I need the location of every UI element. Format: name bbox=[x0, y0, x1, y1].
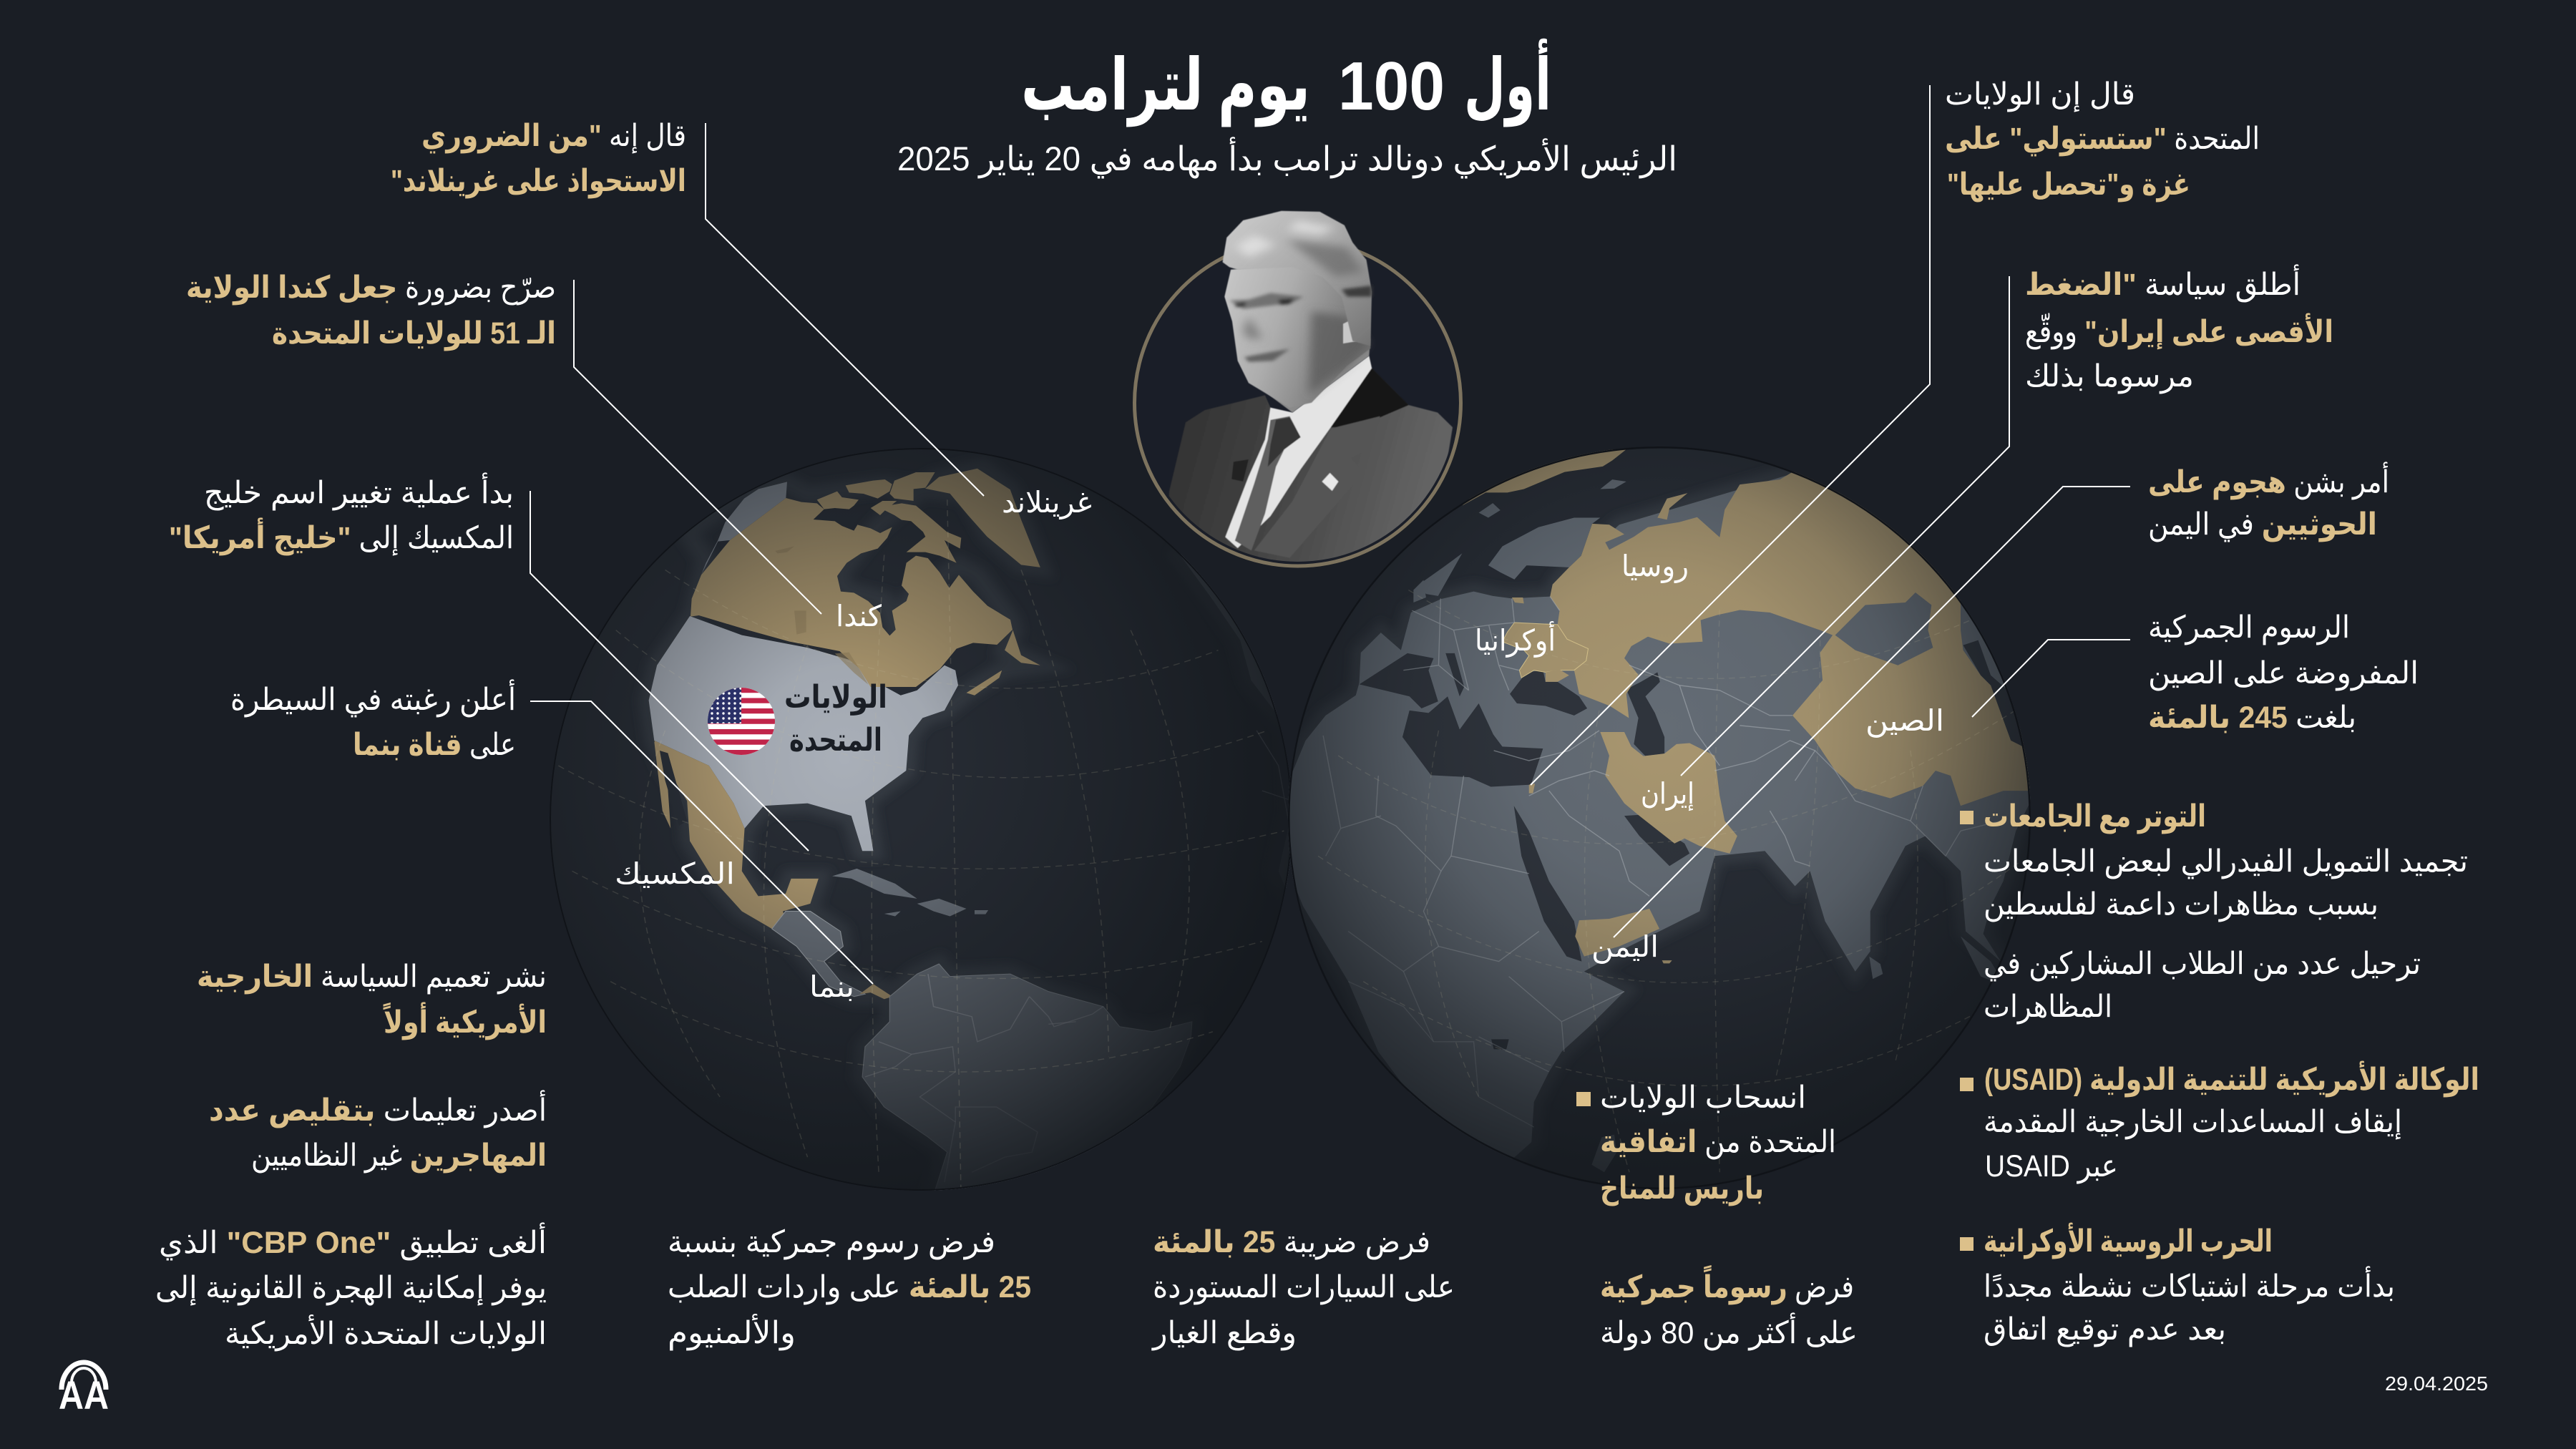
Persian Gulf bbox=[1624, 815, 1689, 866]
text: Russia-Ukraine war: الحرب الروسية الأوكرانية bbox=[1984, 1222, 2273, 1259]
Russia and China bbox=[1550, 464, 2031, 806]
globe shading bbox=[1288, 447, 2031, 1189]
text: America First bbox=[197, 960, 547, 1040]
text: car tariffs: فرض ضريبة 25 بالمئة bbox=[1153, 1225, 1430, 1260]
text: 80 countries bbox=[1600, 1265, 1858, 1351]
text: car tariffs: على السيارات المستوردة bbox=[1153, 1270, 1455, 1305]
text: migrants: أصدر تعليمات بتقليص عدد bbox=[209, 1090, 547, 1128]
Eurasia and Africa land bbox=[1268, 474, 2036, 1187]
Canada, Alaska and Arctic islands bbox=[691, 472, 1013, 687]
Iceland and Svalbard bbox=[1479, 479, 1626, 517]
Scandinavia bbox=[1488, 517, 1600, 580]
text: 80 countries: فرض رسوماً جمركية bbox=[1600, 1265, 1854, 1305]
text: Canada: الـ 51 للولايات المتحدة bbox=[272, 316, 556, 351]
text: Yemen: أمر بشن هجوم على bbox=[2148, 462, 2389, 500]
text: Paris Agreement: باريس للمناخ bbox=[1600, 1171, 1764, 1206]
leader: Yemen bbox=[1614, 487, 2130, 937]
text: Gulf of Mexico: المكسيك إلى "خليج أمريكا" bbox=[169, 517, 514, 556]
Yemen bbox=[1575, 909, 1672, 963]
map labels bbox=[615, 486, 1944, 1003]
text: migrants bbox=[209, 1090, 547, 1174]
text: America First: الأمريكية أولاً bbox=[383, 1002, 547, 1040]
South America bbox=[862, 964, 1192, 1212]
leader: Canada bbox=[574, 280, 821, 614]
title: يوم لترامب bbox=[1021, 45, 1310, 127]
text: Gulf of Mexico: بدأ عملية تغيير اسم خليج bbox=[204, 472, 514, 511]
text: China tariffs: المفروضة على الصين bbox=[2148, 656, 2419, 691]
text: Yemen bbox=[2148, 462, 2389, 542]
Mediterranean Sea bbox=[1360, 653, 1543, 786]
leader: Greenland bbox=[706, 123, 984, 496]
text: Greenland: قال إنه "من الضروري bbox=[421, 119, 686, 154]
label: Yemen: اليمن bbox=[1591, 930, 1659, 964]
text: China tariffs bbox=[2148, 610, 2419, 735]
leader: Gaza bbox=[1531, 85, 1930, 785]
country borders bbox=[865, 731, 1292, 1182]
text: universities: ترحيل عدد من الطلاب المشاركين في bbox=[1984, 947, 2421, 982]
text: universities: تجميد التمويل الفيدرالي لبعض الجامعات bbox=[1984, 844, 2468, 879]
text: steel tariffs: 25 بالمئة على واردات الصلب bbox=[668, 1270, 1031, 1305]
Caribbean islands bbox=[832, 869, 988, 916]
graticule bbox=[1318, 590, 2031, 1172]
Alaska bbox=[701, 482, 787, 575]
text: CBP One: يوفر إمكانية الهجرة القانونية إلى bbox=[155, 1271, 547, 1306]
Gulf of California bbox=[660, 751, 687, 826]
text: universities: بسبب مظاهرات داعمة لفلسطين bbox=[1984, 887, 2379, 922]
bullet bbox=[1960, 811, 1974, 824]
text: steel tariffs bbox=[668, 1225, 1031, 1351]
Lakes bbox=[1491, 1039, 1509, 1049]
text: CBP One bbox=[155, 1222, 547, 1352]
text: Greenland: الاستحواذ على غرينلاند" bbox=[391, 164, 686, 199]
country borders bbox=[1323, 597, 2001, 1127]
Iceland, Europe and Africa edge bbox=[1180, 530, 1355, 911]
logo: AA: AA bbox=[59, 1372, 109, 1418]
text: Russia-Ukraine war: بعد عدم توقيع اتفاق bbox=[1984, 1312, 2226, 1347]
Madagascar bbox=[1591, 1135, 1616, 1172]
text: Canada: صرّح بضرورة جعل كندا الولاية bbox=[186, 270, 556, 306]
Baffin and Arctic islands bbox=[817, 472, 961, 563]
globe: Americas bbox=[550, 448, 1290, 1191]
portrait: Donald Trump in ring bbox=[1135, 211, 1461, 566]
subtitle: الرئيس الأمريكي دونالد ترامب بدأ مهامه في 20 يناير 2025 bbox=[897, 137, 1677, 179]
globe shading bbox=[550, 448, 1292, 1191]
label: China: الصين bbox=[1865, 704, 1944, 738]
title: 100 bbox=[1338, 48, 1445, 125]
text: universities bbox=[1960, 799, 2468, 1025]
text: CBP One: ألغى تطبيق "CBP One" الذي bbox=[159, 1222, 547, 1261]
text: Iran bbox=[2025, 264, 2333, 394]
text: Paris Agreement: انسحاب الولايات bbox=[1600, 1080, 1806, 1116]
label: United States: المتحدة bbox=[789, 723, 882, 758]
text: Russia-Ukraine war bbox=[1960, 1222, 2395, 1347]
text: Gaza bbox=[1945, 77, 2260, 203]
Sea of Japan bbox=[1963, 640, 2031, 751]
bullet bbox=[1576, 1092, 1591, 1106]
text: China tariffs: الرسوم الجمركية bbox=[2148, 610, 2350, 645]
text: universities: التوتر مع الجامعات bbox=[1984, 799, 2206, 834]
text: Paris Agreement bbox=[1576, 1080, 1836, 1206]
label: United States bbox=[784, 680, 887, 758]
label: Russia: روسيا bbox=[1621, 550, 1689, 583]
text: USAID: عبر USAID bbox=[1985, 1149, 2118, 1184]
text: Greenland bbox=[391, 119, 686, 199]
text: Gaza: غزة و"تحصل عليها" bbox=[1947, 167, 2190, 203]
Novaya Zemlya bbox=[1657, 493, 1687, 519]
text: Yemen: الحوثيين في اليمن bbox=[2148, 507, 2377, 542]
label: Ukraine: أوكرانيا bbox=[1475, 621, 1556, 658]
Palestine bbox=[1529, 784, 1535, 794]
graticule bbox=[558, 499, 1284, 1187]
bullet bbox=[1960, 1237, 1974, 1251]
text: 80 countries: على أكثر من 80 دولة bbox=[1600, 1312, 1858, 1351]
Greenland edge bbox=[1462, 449, 1626, 506]
Mongolia bbox=[1835, 592, 1933, 665]
label: Greenland: غرينلاند bbox=[1002, 486, 1092, 519]
leader: China bbox=[1972, 640, 2130, 717]
Kaliningrad bbox=[1512, 597, 1524, 603]
leader: Iran bbox=[1681, 276, 2009, 776]
Indonesia bbox=[1961, 937, 2006, 987]
Central America bbox=[772, 911, 865, 997]
text: USAID: الوكالة الأمريكية للتنمية الدولية (USAID) bbox=[1984, 1060, 2479, 1098]
text: Canada bbox=[186, 270, 556, 351]
Canada mainland bbox=[691, 498, 1013, 687]
Caspian Sea bbox=[1626, 673, 1664, 756]
United States bbox=[649, 616, 958, 851]
Black Sea bbox=[1510, 670, 1587, 716]
Sri Lanka bbox=[1869, 957, 1883, 979]
text: car tariffs: وقطع الغيار bbox=[1151, 1316, 1297, 1351]
text: Gaza: المتحدة "ستستولي" على bbox=[1945, 122, 2260, 157]
text: USAID: إيقاف المساعدات الخارجية المقدمة bbox=[1984, 1105, 2402, 1140]
Iran bbox=[1600, 732, 1737, 854]
text: Russia-Ukraine war: بدأت مرحلة اشتباكات نشطة مجددًا bbox=[1984, 1266, 2395, 1304]
text: migrants: المهاجرين غير النظاميين bbox=[251, 1138, 547, 1174]
label: United States: الولايات bbox=[784, 680, 887, 716]
leader lines bbox=[530, 85, 2130, 984]
leader: Gulf of Mexico bbox=[530, 491, 809, 851]
title: أول bbox=[1464, 38, 1551, 127]
title bbox=[1021, 38, 1551, 127]
globe: Eurasia and Africa bbox=[1268, 447, 2036, 1189]
Canadian lakes bbox=[775, 546, 868, 685]
Mexico bbox=[654, 741, 819, 929]
Newfoundland and Nova Scotia bbox=[967, 630, 1040, 696]
date: 29.04.2025 bbox=[2385, 1372, 2488, 1395]
leader: Panama bbox=[530, 701, 873, 984]
Crimea bbox=[1546, 669, 1569, 682]
icon: US flag bbox=[708, 688, 775, 755]
text: universities: المظاهرات bbox=[1984, 990, 2112, 1025]
text: America First: نشر تعميم السياسة الخارجية bbox=[197, 960, 547, 995]
text: USAID bbox=[1960, 1060, 2479, 1184]
text: Iran: أطلق سياسة "الضغط bbox=[2025, 264, 2301, 303]
text: Panama Canal: أعلن رغبته في السيطرة bbox=[230, 679, 516, 718]
label: Mexico: المكسيك bbox=[615, 857, 735, 890]
text: steel tariffs: والألمنيوم bbox=[668, 1313, 796, 1351]
bullet bbox=[1960, 1078, 1974, 1091]
text: steel tariffs: فرض رسوم جمركية بنسبة bbox=[668, 1225, 995, 1260]
text: Paris Agreement: المتحدة من اتفاقية bbox=[1600, 1125, 1836, 1160]
text: Iran: الأقصى على إيران" ووقّع bbox=[2025, 313, 2333, 350]
label: Panama: بنما bbox=[809, 970, 854, 1003]
label: Canada: كندا bbox=[836, 600, 882, 633]
text: Iran: مرسوما بذلك bbox=[2025, 359, 2194, 394]
British Isles bbox=[1413, 553, 1462, 602]
text: CBP One: الولايات المتحدة الأمريكية bbox=[225, 1314, 547, 1352]
text: Panama Canal: على قناة بنما bbox=[353, 728, 516, 762]
label: Iran: إيران bbox=[1641, 777, 1694, 811]
text: Panama Canal bbox=[230, 679, 516, 762]
text: China tariffs: بلغت 245 بالمئة bbox=[2148, 701, 2356, 735]
text: car tariffs bbox=[1151, 1225, 1455, 1351]
text: Gaza: قال إن الولايات bbox=[1945, 77, 2135, 112]
Red Sea bbox=[1514, 806, 1581, 962]
Panama bbox=[859, 984, 892, 999]
Greenland bbox=[925, 469, 1040, 567]
Ukraine bbox=[1503, 623, 1588, 678]
text: Gulf of Mexico bbox=[169, 472, 514, 556]
